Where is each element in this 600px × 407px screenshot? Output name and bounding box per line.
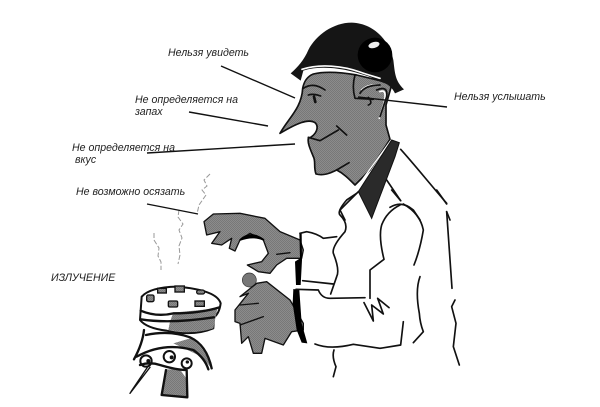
housing shading: [162, 338, 212, 397]
upper hand: [204, 213, 303, 273]
helmet: [291, 23, 404, 93]
flange body: [140, 287, 221, 333]
face and neck: [280, 72, 392, 185]
flange shading: [168, 308, 217, 332]
cuffs: [293, 233, 307, 343]
label: cannot see: Нельзя увидеть: [168, 47, 249, 59]
knuckle shadow: [240, 235, 264, 240]
flange bolts: [147, 286, 205, 307]
illustration: man head and helmet: [280, 23, 450, 220]
ear: [353, 75, 387, 117]
thumb: [242, 273, 256, 287]
shirt fold lines: [370, 190, 459, 365]
eye and brow: [303, 85, 325, 96]
jaw highlight: [357, 141, 391, 187]
helmet brim highlight: [302, 66, 380, 78]
shirt crease mark: [364, 298, 389, 321]
label: no taste: Не определяется на: [72, 142, 175, 154]
bolt circles: [140, 351, 192, 368]
nose and mouth lines: [308, 126, 349, 170]
wavy radiation lines: [154, 174, 210, 270]
illustration: radiation source: [130, 286, 221, 397]
feed tube: [130, 367, 150, 393]
flange rims: [141, 307, 219, 321]
illustration: hands and torso: [204, 190, 459, 377]
label: cannot hear: Нельзя услышать: [454, 91, 546, 103]
label: no smell: Не определяется на: [135, 94, 238, 106]
lamp highlight: [368, 41, 380, 49]
lower hand: [235, 282, 303, 353]
label: no smell: запах: [134, 106, 163, 118]
bolt centres: [146, 355, 189, 364]
pointer lines: [147, 66, 447, 214]
finger lines: [240, 253, 290, 325]
label: cannot touch: Не возможно осязать: [76, 186, 185, 198]
eye pupil: [314, 97, 315, 102]
label: no taste: вкус: [75, 154, 97, 166]
ear highlights: [362, 85, 385, 118]
collar: [358, 140, 399, 218]
label: radiation: ИЗЛУЧЕНИЕ: [51, 272, 116, 284]
helmet lamp: [358, 38, 392, 72]
centre bolt: [164, 351, 175, 362]
right bolt: [182, 358, 192, 368]
left bolt: [140, 355, 152, 367]
sleeves and shirt outline: [296, 193, 403, 377]
lower housing: [134, 330, 212, 397]
collar and chest outline: [340, 149, 450, 220]
